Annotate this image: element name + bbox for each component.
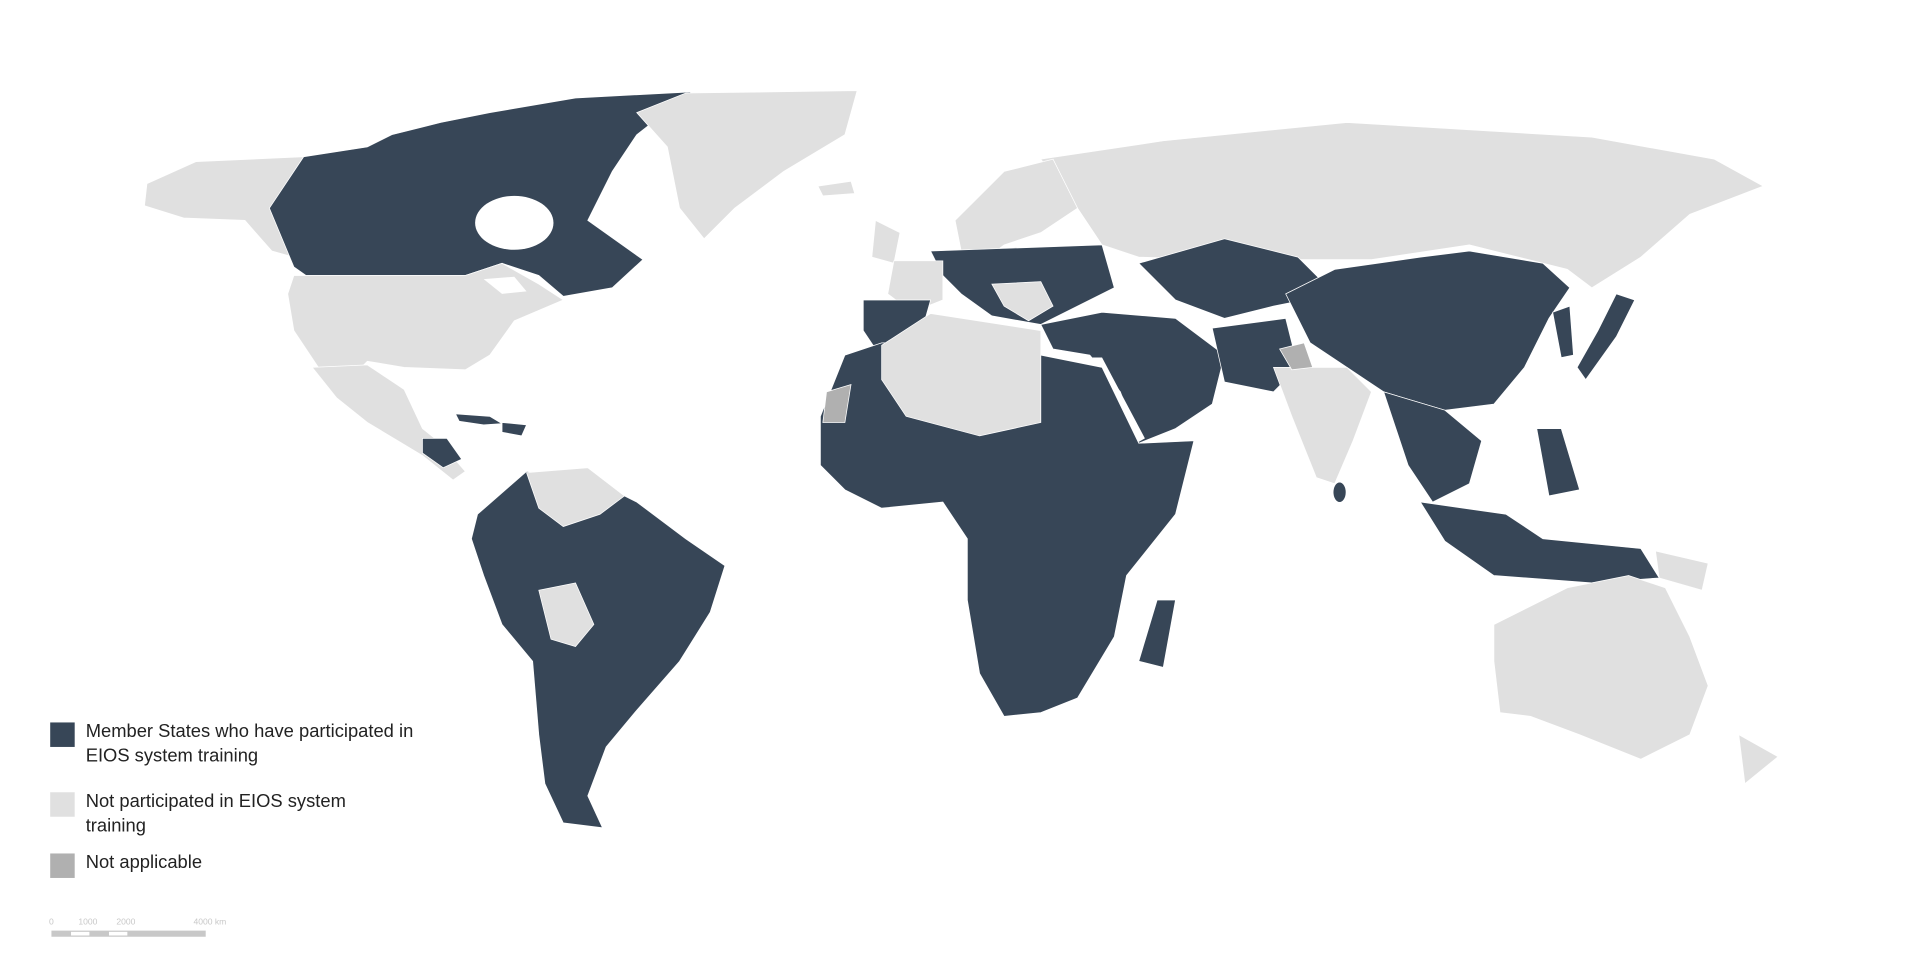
region: Korea: [1553, 306, 1573, 358]
legend: [50, 720, 413, 878]
region: China: [1286, 251, 1570, 410]
region: Bolivia: [539, 583, 594, 647]
region: Pakistan Afghanistan: [1212, 318, 1298, 392]
region: Balkans: [992, 282, 1053, 321]
region: Great Lakes: [484, 277, 527, 294]
region: Central Asia: [1139, 239, 1335, 318]
region: USA: [288, 263, 563, 386]
region: Mexico: [312, 365, 465, 480]
legend item: participated: [50, 720, 413, 766]
legend item: not applicable: Not applicable: [86, 851, 202, 872]
region: Sri Lanka: [1333, 482, 1346, 502]
region: Kashmir: [1280, 343, 1313, 370]
region: Papua New Guinea: [1656, 551, 1708, 590]
region: Europe: [931, 245, 1114, 324]
scale bar: 2000: [116, 916, 136, 926]
region: Western Sahara: [823, 384, 851, 422]
legend item: not applicable: [50, 851, 202, 878]
scale bar: 1000: [78, 916, 98, 926]
region: Japan: [1577, 294, 1635, 380]
region: Russia: [1041, 122, 1763, 288]
map: [144, 91, 1778, 828]
legend item: participated: Member States who have participated in: [86, 720, 413, 741]
region: Red Sea: [1092, 358, 1145, 443]
region: Algeria Libya: [882, 313, 1041, 436]
region: Scandinavia: [955, 159, 1078, 263]
region: Central America: [422, 438, 462, 468]
region: Madagascar: [1139, 600, 1176, 667]
region: Australia: [1494, 576, 1708, 759]
region: Hudson Bay: [475, 196, 553, 250]
region: New Zealand: [1739, 735, 1778, 784]
region: Middle East: [1041, 312, 1224, 443]
legend item: participated: EIOS system training: [86, 745, 258, 766]
legend item: not participated: training: [86, 814, 146, 835]
region: Canada: [269, 92, 692, 296]
region: UK: [872, 220, 900, 263]
region: France: [888, 261, 943, 312]
scale bar: [49, 916, 226, 937]
region: Hispaniola: [502, 422, 527, 436]
scale bar: 4000 km: [193, 916, 226, 926]
region: Iceland: [818, 181, 855, 196]
region: South America: [471, 471, 725, 828]
legend item: not participated: [50, 790, 346, 835]
scale bar: 0: [49, 916, 54, 926]
region: Southeast Asia: [1384, 392, 1482, 502]
region: Africa: [820, 343, 1194, 716]
region: India: [1273, 367, 1371, 484]
legend item: not participated: Not participated in EIOS system: [86, 790, 346, 811]
region: Iberia: [863, 300, 931, 349]
region: Alaska: [144, 157, 304, 257]
region: Greenland: [637, 91, 857, 239]
region: Venezuela: [527, 468, 624, 527]
region: Philippines: [1537, 429, 1580, 496]
region: Indonesia: [1420, 502, 1659, 583]
region: Caribbean: [456, 414, 502, 425]
